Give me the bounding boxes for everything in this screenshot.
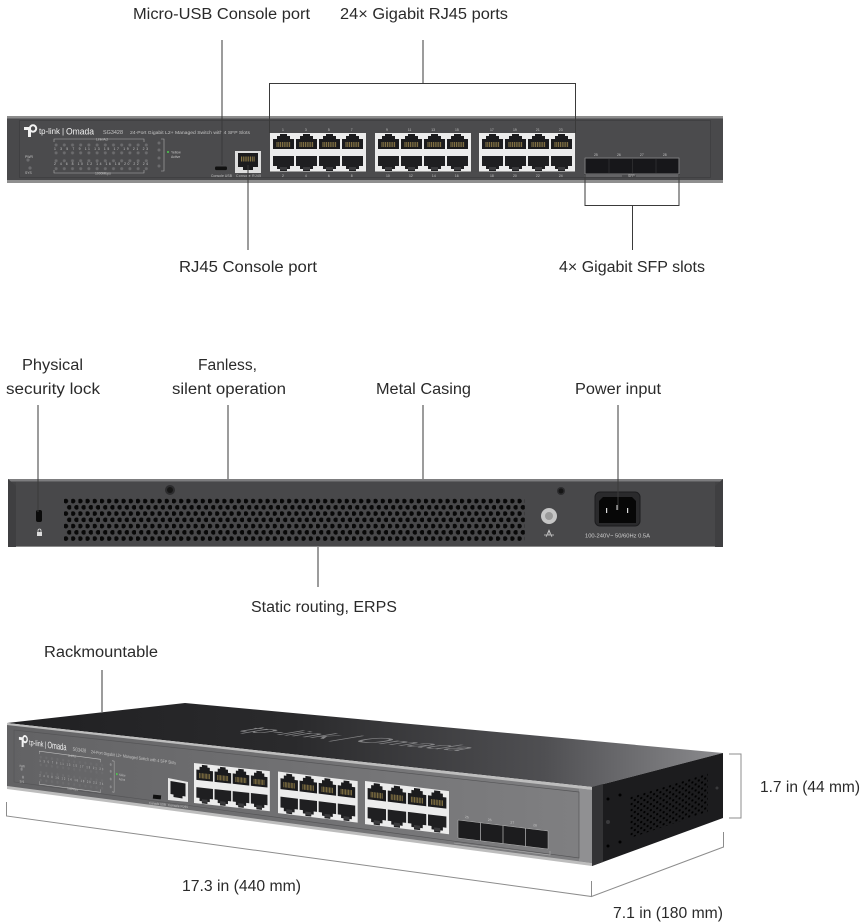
LED panel: Yellow bbox=[171, 150, 181, 154]
label: depth: 7.1 in (180 mm) bbox=[613, 905, 723, 922]
24 RJ45 ports: 9 11 13 15 bbox=[386, 128, 459, 132]
LED grid: 1 3 5 7 9 11 13 15 17 19 21 23 bbox=[39, 758, 104, 772]
logo and model: Omada bbox=[47, 740, 67, 753]
label: width: 17.3 in (440 mm) bbox=[182, 878, 301, 895]
brand logo: tp-link bbox=[39, 127, 61, 136]
power rating text: 100-240V~ 50/60Hz 0.5A bbox=[585, 534, 650, 540]
LED panel: 1000Mbps bbox=[95, 172, 111, 176]
height dimension bracket bbox=[729, 754, 741, 818]
label: power input: Power input bbox=[575, 381, 662, 398]
micro-USB console port: Console USB bbox=[149, 801, 166, 807]
LED panel: SYS bbox=[25, 171, 33, 175]
label: physical security lock bbox=[6, 357, 100, 398]
24 RJ45 ports: 10 12 14 16 bbox=[386, 174, 459, 178]
depth dimension line bbox=[592, 832, 724, 896]
LED grid: PWR bbox=[20, 764, 25, 769]
side face bbox=[592, 753, 723, 866]
leader: rackmountable bbox=[101, 670, 103, 712]
SFP slots: 25 26 27 28 bbox=[465, 815, 537, 828]
leader: 24 gigabit ports bracket bbox=[270, 40, 576, 133]
leader: power input bbox=[617, 405, 619, 510]
brand logo: | bbox=[62, 127, 64, 136]
micro-USB console port bbox=[149, 795, 166, 807]
label: micro-USB console port: Micro-USB Console port bbox=[133, 6, 311, 23]
label: RJ45 console port: RJ45 Console port bbox=[179, 259, 318, 276]
leader: static routing bbox=[317, 547, 319, 587]
label: static routing: Static routing, ERPS bbox=[251, 599, 397, 616]
24 RJ45 ports: 2 4 6 8 bbox=[282, 174, 353, 178]
label: SFP slots: 4× Gigabit SFP slots bbox=[559, 259, 705, 276]
leader: SFP bracket bbox=[585, 174, 679, 250]
4 SFP slots: SFP bbox=[628, 174, 635, 178]
micro-USB console port bbox=[211, 166, 233, 178]
top face: tp-link | Omada bbox=[227, 726, 490, 752]
ventilation grille bbox=[64, 498, 525, 542]
LED panel bbox=[25, 138, 181, 176]
model text bbox=[103, 130, 251, 136]
LED grid: 2 4 6 8 10 12 14 16 18 20 22 24 bbox=[39, 773, 104, 786]
brand logo bbox=[24, 125, 95, 138]
LED grid: SYS bbox=[20, 779, 24, 784]
top face bbox=[7, 703, 723, 787]
micro-USB console port: Console USB bbox=[211, 174, 233, 178]
logo and model: tp-link bbox=[29, 739, 44, 749]
24 RJ45 ports: 1 3 5 7 bbox=[282, 128, 353, 132]
label: metal casing: Metal Casing bbox=[376, 381, 471, 398]
rear body bbox=[8, 479, 723, 547]
label: rackmountable: Rackmountable bbox=[44, 644, 158, 661]
switch front body bbox=[7, 116, 723, 183]
LED panel: PWR bbox=[25, 155, 33, 159]
panel: front view of switch bbox=[7, 116, 723, 183]
front face bbox=[7, 723, 592, 866]
4 SFP slots: 25 26 27 28 bbox=[594, 153, 667, 157]
RJ45 console port: Console RJ45 bbox=[168, 803, 188, 809]
LED grid bbox=[20, 747, 126, 798]
LED panel: Active bbox=[171, 155, 180, 159]
24 RJ45 ports: 18 20 22 24 bbox=[490, 174, 563, 178]
panel: perspective view of switch bbox=[7, 703, 723, 866]
LED grid: 1000Mbps bbox=[67, 786, 78, 792]
label: physical security lock: Physical bbox=[22, 357, 83, 374]
width dimension line bbox=[6, 802, 592, 896]
label: fanless: silent operation bbox=[172, 381, 286, 398]
LED panel: Link/Act bbox=[96, 138, 108, 142]
4 SFP slots bbox=[584, 153, 680, 178]
RJ45 port groups bbox=[194, 763, 449, 834]
leader: security lock bbox=[37, 405, 39, 512]
LED grid: Link/Act bbox=[68, 753, 76, 759]
brand logo: Omada bbox=[66, 126, 95, 138]
logo and model: | bbox=[45, 741, 46, 750]
security lock slot bbox=[36, 510, 42, 536]
panel: rear view of switch bbox=[8, 479, 723, 547]
LED grid: Active bbox=[119, 777, 125, 782]
logo and model: SG3428 bbox=[73, 746, 87, 754]
label: fanless: Fanless, bbox=[198, 357, 257, 374]
label: height: 1.7 in (44 mm) bbox=[760, 779, 860, 796]
model text: 24-Port Gigabit L2+ Managed Switch with 4 SFP Slots bbox=[130, 130, 251, 135]
24 RJ45 ports: 17 19 21 23 bbox=[490, 128, 563, 132]
24 RJ45 ports bbox=[270, 128, 575, 178]
LED grid: Yellow bbox=[119, 772, 126, 778]
grounding screw bbox=[541, 508, 557, 537]
label: RJ45 ports: 24× Gigabit RJ45 ports bbox=[340, 6, 508, 23]
leader: fanless bbox=[227, 405, 229, 479]
model text: SG3428 bbox=[103, 130, 123, 136]
leader: metal casing bbox=[422, 405, 424, 479]
label: fanless bbox=[172, 357, 286, 398]
LED panel: 1 3 5 7 9 11 13 15 17 19 21 23 bbox=[54, 147, 148, 151]
RJ45 console port: Console RJ45 bbox=[236, 174, 261, 178]
chassis screws bbox=[165, 485, 565, 495]
RJ45 console port bbox=[168, 778, 188, 809]
LED panel: 2 4 6 8 10 12 14 16 18 20 22 24 bbox=[54, 162, 148, 166]
leader: RJ45 console bbox=[247, 165, 249, 250]
logo and model bbox=[19, 735, 176, 767]
logo and model: 24-Port Gigabit L2+ Managed Switch with 4 SFP Slots bbox=[91, 750, 176, 766]
RJ45 console port bbox=[235, 151, 261, 178]
label: physical security lock: security lock bbox=[6, 381, 100, 398]
leader: micro-USB console bbox=[221, 40, 223, 165]
power inlet bbox=[595, 492, 640, 526]
SFP slots bbox=[454, 815, 550, 855]
front labels and LEDs bbox=[19, 735, 176, 805]
